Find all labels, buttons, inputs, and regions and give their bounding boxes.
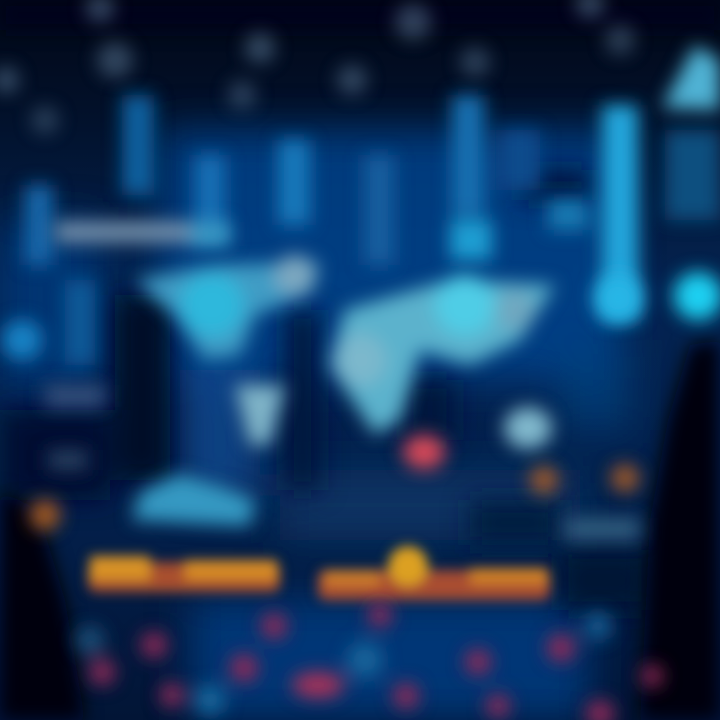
cloud bbox=[132, 474, 255, 526]
dark blotches bbox=[0, 170, 650, 610]
grey labels and top dots bbox=[0, 0, 640, 540]
background glow bbox=[0, 130, 630, 720]
vertical data bars bbox=[25, 95, 720, 365]
pink dots row bbox=[76, 603, 663, 720]
orange banners bbox=[88, 546, 550, 600]
world map bbox=[135, 255, 555, 449]
bright nodes bbox=[2, 45, 720, 360]
accent dots bbox=[30, 435, 639, 530]
